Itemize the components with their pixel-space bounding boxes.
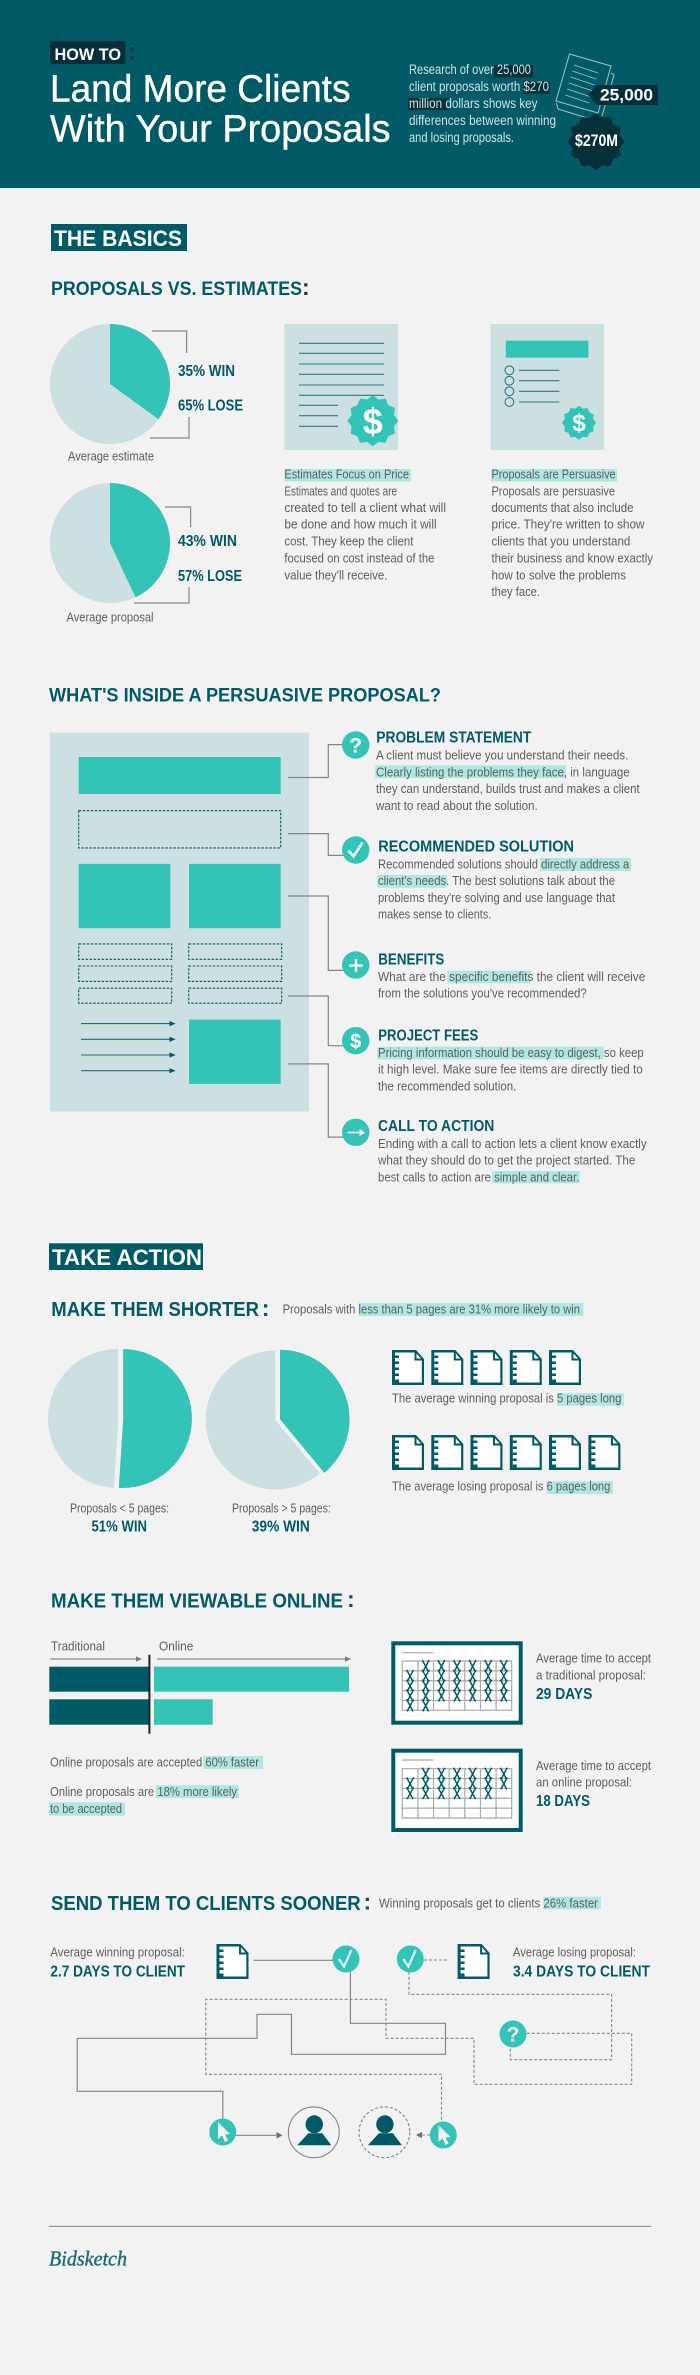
section heading: take action: TAKE ACTION [52,1245,202,1270]
project fees text [377,1027,644,1093]
text: estimates focus on price: Estimates Focus on Price [284,466,409,481]
text: average losing proposal days [513,1945,650,1980]
footer rule [49,2226,651,2227]
call to action text: Ending with a call to action lets a client know exactly [378,1136,647,1151]
text: average winning proposal days: 2.7 DAYS TO CLIENT [50,1964,185,1981]
bar chart: traditional vs online: Online [159,1639,193,1654]
icon: winning proposal document [216,1944,248,1979]
icon: plus [342,951,369,979]
call to action text: best calls to action are simple and clear. [378,1169,579,1184]
text: average losing proposal days: Average losing proposal: [513,1945,636,1960]
text: average losing proposal days: 3.4 DAYS TO CLIENT [513,1963,650,1980]
text: online proposal stats: Online proposals are accepted 60% faster [50,1755,260,1770]
pie: average proposal: Average proposal [66,610,154,625]
call to action text: what they should do to get the project started. The [377,1153,635,1168]
call to action text: CALL TO ACTION [378,1118,494,1135]
item: problem statement [342,730,640,813]
item: call to action [342,1118,647,1184]
text: proposals are persuasive [491,466,653,599]
pie: average proposal: 43% WIN [178,533,237,550]
pie: average estimate: Average estimate [68,449,154,464]
subheading: send them to clients sooner: : [364,1888,371,1914]
subheading: proposals vs estimates: PROPOSALS VS. ESTIMATES [51,279,302,300]
title: Land More Clients [50,69,350,111]
how to label: : [128,38,136,66]
stat: faster delivery: Winning proposals get to clients 26% faster [379,1895,599,1910]
icon: losing cursor [430,2122,457,2148]
icons: winning proposal pages [392,1350,581,1385]
pie: average estimate [50,324,243,464]
subheading: what's inside a persuasive proposal: WHAT'S INSIDE A PERSUASIVE PROPOSAL? [49,685,441,706]
text: estimates focus on price: be done and how much it will [284,517,437,532]
problem statement text: Clearly listing the problems they face, in language [376,764,630,779]
text: estimates focus on price: cost. They keep the client [284,534,414,549]
intro text: client proposals worth $270 [409,79,549,94]
pie: average estimate: 65% LOSE [178,398,243,415]
badge: $270M [568,113,624,170]
icon: proposal stack [556,54,614,122]
bar chart: traditional vs online [49,1639,351,1734]
project fees text: it high level. Make sure fee items are directly tied to [378,1062,643,1077]
problem statement text: they can understand, builds trust and makes a client [376,781,640,796]
benefits text: from the solutions you've recommended? [378,986,587,1001]
intro text: and losing proposals. [409,130,514,145]
text: proposals are persuasive: Proposals are Persuasive [492,466,616,481]
tag: 25,000: 25,000 [600,86,653,105]
benefits text [378,951,645,1001]
recommended solution text: problems they're solving and use language that [378,890,615,905]
intro text: million dollars shows key [409,96,538,111]
header banner [0,0,700,188]
text: proposals are persuasive: Proposals are persuasive [492,483,615,498]
text: average winning proposal days: Average winning proposal: [50,1945,185,1960]
icon: arrow [342,1119,369,1146]
panel: estimate document icon: $ [363,401,383,442]
icon: losing check [397,1946,424,1972]
connector lines [288,745,345,1137]
pie: average proposal [50,483,242,625]
text: 18 days [536,1758,651,1810]
text: proposals are persuasive: they face. [492,584,540,599]
project fees text: Pricing information should be easy to digest, so keep [378,1045,644,1060]
text: estimates focus on price: value they'll receive. [284,567,388,582]
icon: winning client [288,2107,339,2158]
icon: winning check [332,1946,360,1972]
icons: losing proposal pages [392,1435,620,1470]
icon: question mark: ? [349,734,362,758]
text: proposals are persuasive: clients that you understand [492,534,630,549]
intro text [408,62,556,145]
pie: average estimate: 35% WIN [178,363,235,380]
text: proposals are persuasive: price. They're written to show [492,517,645,532]
text: proposals are persuasive: their business and know exactly [492,550,653,565]
title: With Your Proposals [50,109,390,151]
text: proposals are persuasive: documents that also include [492,500,634,515]
text: 29 days [536,1651,651,1703]
text: estimates focus on price: created to tell a client what will [284,500,446,515]
stat: fewer pages: Proposals with less than 5 pages are 31% more likely to win [283,1301,580,1316]
benefits text: BENEFITS [378,951,445,968]
subheading: proposals vs estimates: : [302,274,310,300]
icon: winning cursor [209,2118,236,2146]
icon: check mark [342,836,369,864]
icon: losing proposal document [458,1944,490,1979]
recommended solution text [377,839,631,922]
icon: question: ? [507,2024,519,2046]
item: recommended solution [342,836,631,922]
subheading: send them to clients sooner: SEND THEM TO CLIENTS SOONER [51,1893,361,1915]
text: estimates focus on price: focused on cost instead of the [284,550,434,565]
path: losing route [206,1960,632,2122]
item: benefits [342,951,645,1001]
section heading: the basics: THE BASICS [54,226,182,251]
problem statement text: A client must believe you understand their needs. [376,747,628,762]
pie: proposals under 5 pages: Proposals < 5 pages: [70,1501,169,1516]
icon: dollar: $ [350,1031,361,1053]
subheading: make them shorter: : [262,1295,269,1321]
icon: question mark [342,731,369,759]
subheading: make them shorter: MAKE THEM SHORTER [51,1299,260,1321]
project fees text: the recommended solution. [378,1078,516,1093]
pie: proposals over 5 pages [206,1350,350,1536]
panel: estimate document icon [284,324,398,450]
icon: dollar [342,1027,369,1054]
panel: proposal document icon: $ [572,410,586,437]
text: average winning proposal: The average winning proposal is 5 pages long [392,1391,621,1406]
problem statement text: PROBLEM STATEMENT [376,730,531,747]
text: online proposal stats [49,1755,263,1816]
icon: losing client [359,2107,410,2158]
how to label [50,38,136,66]
subheading: make them viewable online: : [347,1586,355,1612]
intro text: Research of over 25,000 [409,62,531,77]
arrow: to winning client [236,2132,283,2139]
panel: proposal anatomy [50,732,309,1112]
problem statement text [375,730,640,813]
text: proposals are persuasive: how to solve the problems [492,567,626,582]
panel: proposal document icon [491,324,604,450]
text: online proposal stats: Online proposals are 18% more likely [50,1784,237,1799]
bar chart: traditional vs online: Traditional [51,1639,105,1654]
recommended solution text: makes sense to clients. [378,907,491,922]
pie: proposals under 5 pages [48,1349,192,1536]
recommended solution text: RECOMMENDED SOLUTION [378,839,574,856]
text: average winning proposal days [50,1945,185,1981]
text: 29 days: Average time to accept [536,1651,651,1666]
title [50,69,390,151]
text: estimates focus on price: Estimates and quotes are [284,483,397,498]
text: average losing proposal: The average losing proposal is 6 pages long [392,1479,610,1494]
pie: proposals under 5 pages: 51% WIN [92,1519,147,1536]
recommended solution text: Recommended solutions should directly address a [378,856,630,871]
icon: question [500,2020,526,2048]
text: online proposal stats: to be accepted [50,1801,122,1816]
badge: $270M: $270M [575,132,618,150]
logo: bidsketch: Bidsketch [49,2247,127,2271]
text: 29 days: 29 DAYS [536,1686,593,1703]
text: 18 days: Average time to accept [536,1758,651,1773]
text: 18 days: an online proposal: [536,1775,632,1790]
pie: proposals over 5 pages: 39% WIN [252,1519,310,1536]
problem statement text: want to read about the solution. [375,798,538,813]
icon: calendar 18 days [393,1751,521,1830]
icon: calendar 29 days [393,1643,521,1723]
intro text: differences between winning [409,113,556,128]
subheading: make them viewable online: MAKE THEM VIEWABLE ONLINE [51,1590,343,1612]
call to action text [377,1118,647,1184]
recommended solution text: client's needs. The best solutions talk about the [378,873,615,888]
text: 18 days: 18 DAYS [536,1793,590,1810]
pie: proposals over 5 pages: Proposals > 5 pages: [232,1501,331,1516]
path: winning route [77,1960,445,2118]
item: project fees [342,1027,644,1093]
pie: average proposal: 57% LOSE [178,568,242,585]
text: estimates focus on price [284,466,446,582]
text: 29 days: a traditional proposal: [536,1667,646,1682]
how to label: HOW TO [54,45,121,64]
project fees text: PROJECT FEES [378,1027,479,1044]
arrow: to losing client [416,2132,430,2138]
benefits text: What are the specific benefits the client will receive [378,969,645,984]
